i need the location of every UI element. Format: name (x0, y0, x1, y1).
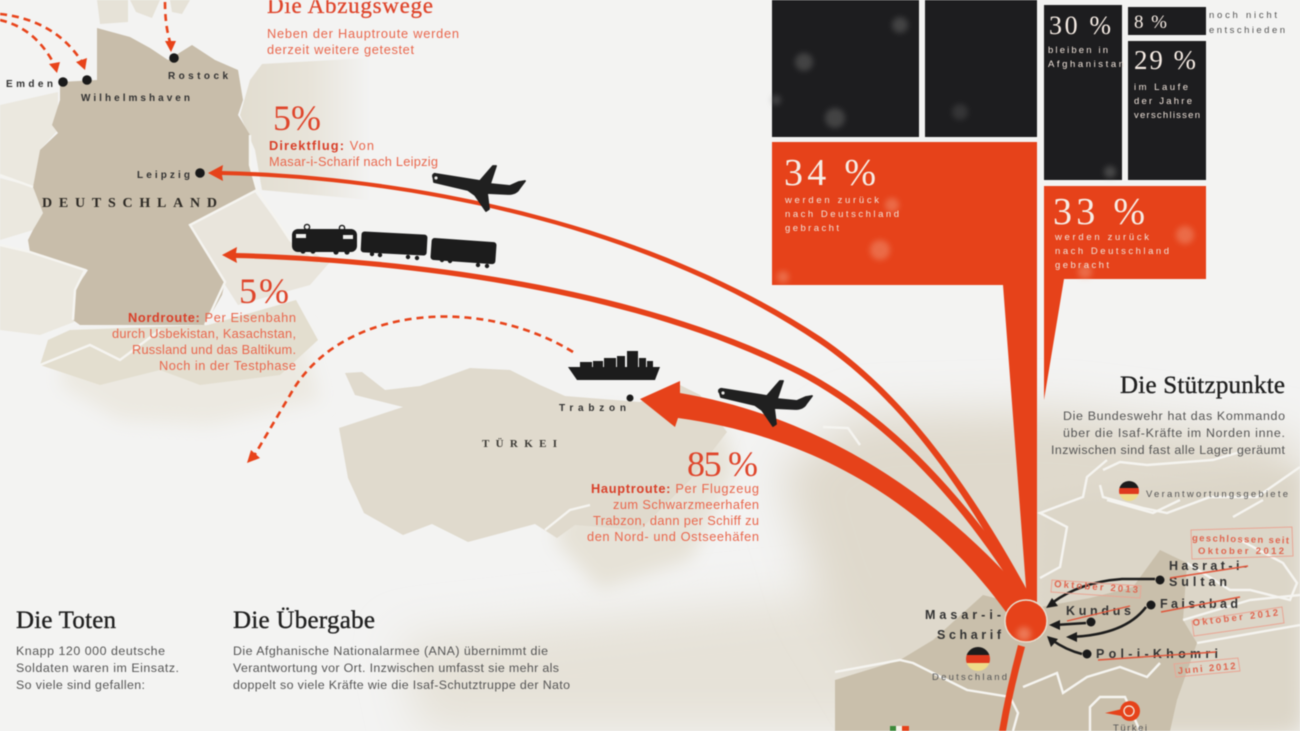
map: Afghanistan region (835, 550, 1197, 731)
text: Abzugswege intro: Neben der Hauptroute werden (267, 26, 459, 41)
bar: black 29 percent (1128, 41, 1206, 180)
callout: Hauptroute 85 percent: Hauptroute: Per Flugzeug (591, 481, 759, 496)
text: Die Übergabe body: doppelt so viele Kräfte wie die Isaf-Schutztruppe der Nato (233, 678, 570, 692)
base labels struck through: Faisabad (1160, 597, 1238, 611)
base labels struck through: Pol-i-Khomri (1096, 647, 1218, 661)
text: Stützpunkte intro (1051, 409, 1286, 457)
base labels struck through: Hasrat-i- (1169, 559, 1247, 573)
text: Stützpunkte intro: Die Bundeswehr hat das Kommando (1063, 409, 1285, 423)
label: Türkei: TÜRKEI (482, 437, 557, 450)
text: Stützpunkte intro: Inzwischen sind fast alle Lager geräumt (1051, 443, 1286, 457)
German cities: Wilhelmshaven (81, 93, 190, 104)
stamps: closure dates: geschlossen seit (1192, 533, 1290, 547)
text: Die Toten body: So viele sind gefallen: (16, 678, 145, 692)
text: Stützpunkte intro: über die Isaf-Kräfte im Norden inne. (1063, 426, 1285, 440)
icon: plane over Hauptroute (719, 381, 812, 426)
icon: Italian flag marker (890, 726, 909, 731)
heading: Die Übergabe: Die Übergabe (233, 607, 375, 634)
callout: Nordroute 5 percent (112, 271, 296, 373)
icon: Turkish marker (1105, 701, 1147, 731)
callout: Hauptroute 85 percent (587, 444, 759, 544)
text: Abzugswege intro (267, 26, 459, 57)
bar: red 34 percent with pointer: werden zurück (784, 195, 879, 206)
label: Trabzon (559, 394, 634, 414)
callout: Hauptroute 85 percent: Trabzon, dann per Schiff zu (593, 513, 759, 528)
dashed route arrowheads (49, 41, 260, 463)
icon: German flag Deutschland: Deutschland (932, 672, 1007, 683)
label: Deutschland: DEUTSCHLAND (42, 196, 217, 211)
stamps: closure dates: Oktober 2012 (1192, 608, 1279, 629)
text: Die Übergabe body: Die Afghanische Nationalarmee (ANA) übernimmt die (233, 644, 548, 658)
text: Die Übergabe body (233, 644, 570, 692)
callout: Direktflug 5 percent: 5% (273, 98, 321, 138)
black withdrawal arrows and bases (1046, 576, 1164, 658)
stamps: closure dates: Juni 2012 (1177, 661, 1236, 677)
bar: red 34 percent with pointer: 34 % (784, 152, 876, 194)
base labels struck through: Kundus (1066, 604, 1131, 618)
icon: plane over Direktflug route (433, 166, 525, 211)
route: Nordroute line with arrow (222, 247, 1032, 604)
bar: black 30 percent: 30 % (1049, 11, 1111, 40)
icon: container ship (568, 351, 660, 380)
callout: Nordroute 5 percent: Noch in der Testphase (159, 358, 296, 373)
callout: Nordroute 5 percent: Nordroute: Per Eisenbahn (128, 310, 296, 325)
bar: black 29 percent: verschlissen (1134, 110, 1200, 121)
text: Die Toten body (16, 644, 179, 692)
callout: Direktflug 5 percent: Masar-i-Scharif nach Leipzig (269, 154, 438, 169)
callout: Direktflug 5 percent (269, 98, 438, 169)
base labels struck through: Sultan (1169, 575, 1227, 589)
route: Hauptroute thick arrow (640, 381, 1028, 612)
label: Masar-i-Scharif: Scharif (937, 628, 1002, 642)
callout: Nordroute 5 percent: Russland und das Baltikum. (132, 342, 296, 357)
bar: black 8 percent: 8 % (1134, 12, 1167, 33)
heading: Die Toten: Die Toten (16, 607, 116, 634)
stamps: closure dates (1051, 527, 1293, 677)
text: Die Toten body: Knapp 120 000 deutsche (16, 644, 165, 658)
legend: Verantwortungsgebiete flag (1119, 481, 1288, 501)
label: noch nicht entschieden: noch nicht (1209, 10, 1277, 21)
legend: Verantwortungsgebiete flag: Verantwortungsgebiete (1146, 489, 1288, 500)
German cities: Rostock (168, 71, 228, 82)
text: Die Übergabe body: Verantwortung vor Ort. Inzwischen umfasst sie mehr als (233, 661, 559, 675)
bar: red 33 percent with pointer (1044, 186, 1206, 400)
route: Direktflug line with arrow (208, 165, 1034, 607)
label: noch nicht entschieden (1209, 10, 1285, 36)
callout: Nordroute 5 percent: durch Usbekistan, Kasachstan, (112, 326, 296, 341)
stamps: closure dates: Oktober 2013 (1054, 579, 1138, 596)
bar: red 33 percent with pointer: nach Deutschland (1055, 246, 1169, 257)
heading: Die Stützpunkte: Die Stützpunkte (1120, 372, 1285, 399)
German cities: Leipzig (137, 170, 190, 181)
bar: red 34 percent with pointer: gebracht (785, 223, 839, 234)
bar: red 33 percent with pointer: gebracht (1055, 260, 1109, 271)
red line south from Masar-i-Scharif (999, 645, 1025, 731)
text: Abzugswege intro: derzeit weitere getestet (267, 42, 414, 57)
hub: Masar-i-Scharif circle (1005, 600, 1047, 642)
bar: red 33 percent with pointer: werden zurück (1054, 232, 1149, 243)
bar: black 30 percent: bleiben in (1048, 45, 1108, 56)
icon: train over Nordroute (292, 224, 497, 268)
map: Turkey (339, 368, 735, 590)
callout: Nordroute 5 percent: 5 % (239, 271, 289, 311)
bar: red 34 percent with pointer: nach Deutschland (785, 209, 899, 220)
German cities (6, 53, 228, 181)
label: Masar-i-Scharif (925, 608, 1002, 642)
bar: black 8 percent (1128, 7, 1206, 35)
label: Trabzon: Trabzon (559, 403, 626, 414)
callout: Hauptroute 85 percent: den Nord- und Ostseehäfen (587, 529, 759, 544)
map: Germany (28, 28, 257, 325)
bar: black block left (771, 0, 919, 137)
bar: black 30 percent: Afghanistan (1048, 59, 1124, 70)
label: Masar-i-Scharif: Masar-i- (925, 608, 1001, 622)
callout: Hauptroute 85 percent: zum Schwarzmeerhafen (613, 497, 759, 512)
stamps: closure dates: Oktober 2012 (1198, 546, 1284, 557)
icon: German flag Deutschland (932, 647, 1007, 683)
callout: Hauptroute 85 percent: 85 % (687, 444, 758, 484)
callout: Direktflug 5 percent: Direktflug: Von (269, 138, 374, 153)
bar: black 29 percent: im Laufe (1134, 82, 1188, 93)
dashed sea routes to German ports (0, 2, 573, 456)
bar: black 30 percent (1044, 5, 1124, 180)
bar: black 29 percent: der Jahre (1134, 96, 1192, 107)
base labels struck through (1066, 559, 1248, 661)
German cities: Emden (6, 79, 53, 90)
bar: black 29 percent: 29 % (1134, 45, 1196, 75)
text: Die Toten body: Soldaten waren im Einsatz. (16, 661, 179, 675)
label: noch nicht entschieden: entschieden (1209, 25, 1285, 36)
bar: red 33 percent with pointer: 33 % (1053, 191, 1145, 233)
bar: red 34 percent with pointer (772, 142, 1037, 640)
bar: black block second (925, 0, 1037, 137)
